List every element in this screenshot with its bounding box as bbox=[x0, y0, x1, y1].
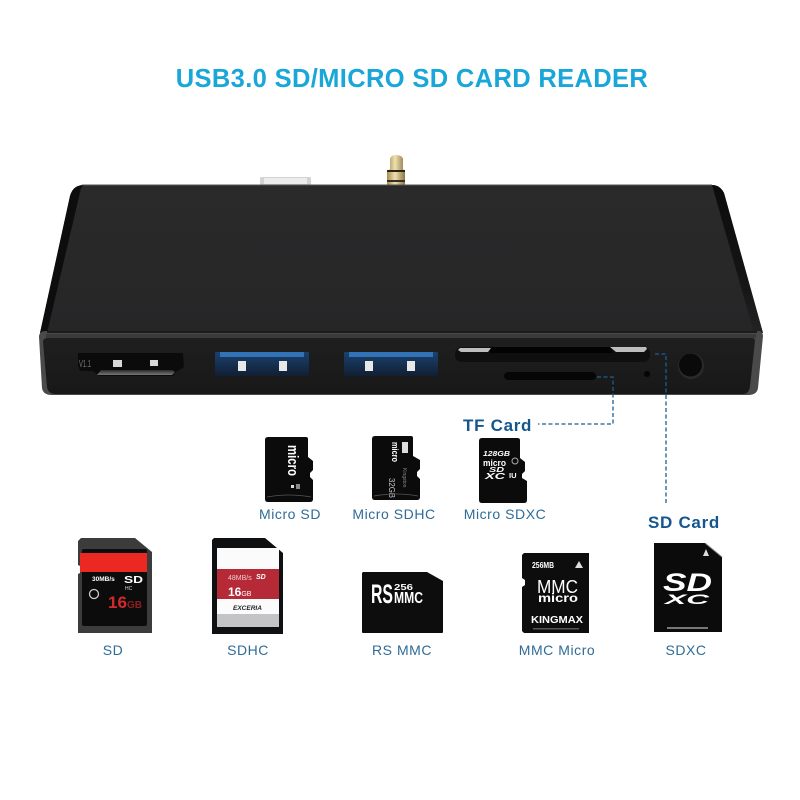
dashed line: SD Card bbox=[655, 354, 666, 503]
HDMI port: V1.1 bbox=[79, 359, 91, 370]
label: Micro SDXC: Micro SDXC bbox=[464, 506, 546, 522]
card: MMC Micro bbox=[522, 553, 589, 633]
card: SDHC: SD bbox=[256, 574, 266, 581]
card: RS MMC bbox=[362, 572, 443, 633]
card: SDXC: XC bbox=[663, 591, 711, 607]
card: RS MMC: RS bbox=[371, 579, 393, 609]
card: SDHC: 48MB/s bbox=[228, 575, 252, 582]
card: SD bbox=[78, 538, 152, 633]
card: RS MMC: MMC bbox=[394, 590, 423, 607]
card: MMC Micro: micro bbox=[538, 591, 578, 605]
card: MMC Micro: MMC bbox=[537, 577, 578, 597]
card: SD: 30MB/s bbox=[92, 576, 115, 583]
card: SDHC: EXCERIA bbox=[233, 605, 262, 612]
audio jack socket bbox=[678, 353, 704, 379]
card: SDHC: 16GB bbox=[228, 585, 252, 599]
TF card slot bbox=[504, 372, 596, 380]
HDMI port bbox=[78, 353, 184, 376]
device: USB-C hub bbox=[39, 155, 763, 395]
reset hole bbox=[644, 371, 650, 377]
card: MMC Micro: 256MB bbox=[532, 561, 554, 570]
card: SDXC bbox=[654, 543, 722, 632]
label: SDXC: SDXC bbox=[665, 642, 707, 658]
card: SD: SD bbox=[124, 575, 143, 586]
card: SD: 16 bbox=[108, 593, 127, 612]
label: SD: SD bbox=[103, 642, 123, 658]
title: USB3.0 SD/MICRO SD CARD READER bbox=[176, 65, 648, 93]
card: SDXC: SD bbox=[663, 569, 712, 597]
label: Micro SDHC: Micro SDHC bbox=[352, 506, 436, 522]
card: Micro SDXC: 128GB bbox=[483, 451, 510, 458]
label: RS MMC: RS MMC bbox=[372, 642, 432, 658]
card: Micro SDXC: micro bbox=[483, 458, 506, 468]
card: MMC Micro: KINGMAX bbox=[531, 614, 583, 626]
card: RS MMC: 256 bbox=[394, 583, 414, 592]
card: Micro SDXC: IU bbox=[509, 471, 516, 480]
audio jack plug bbox=[387, 155, 405, 185]
label: Micro SD: Micro SD bbox=[259, 506, 321, 522]
card: SD: GB bbox=[127, 600, 142, 611]
heading: SD Card: SD Card bbox=[648, 513, 720, 532]
device top face bbox=[40, 185, 763, 333]
dashed line: TF Card bbox=[538, 377, 613, 424]
card: SD: HC bbox=[125, 586, 133, 592]
label: SDHC: SDHC bbox=[227, 642, 269, 658]
device front face bbox=[39, 331, 763, 395]
USB 3.0 port 1 bbox=[215, 352, 309, 376]
heading: TF Card: TF Card bbox=[463, 416, 532, 435]
card: Micro SD: micro bbox=[284, 445, 301, 476]
card: SDHC bbox=[212, 538, 283, 634]
card: Micro SDHC bbox=[372, 436, 420, 500]
USB-C plug bbox=[260, 177, 311, 185]
card: Micro SDHC: Kingston bbox=[401, 468, 407, 488]
card: Micro SDXC: SD bbox=[489, 467, 504, 474]
card: Micro SDXC: XC bbox=[483, 471, 506, 481]
card: Micro SD bbox=[265, 437, 313, 502]
USB 3.0 port 2 bbox=[344, 352, 438, 376]
label: MMC Micro: MMC Micro bbox=[519, 642, 595, 658]
card: Micro SDXC bbox=[479, 438, 527, 503]
card: Micro SDHC: micro bbox=[389, 442, 400, 462]
SD card slot bbox=[455, 347, 650, 362]
card: Micro SDHC: 32GB bbox=[387, 478, 396, 498]
